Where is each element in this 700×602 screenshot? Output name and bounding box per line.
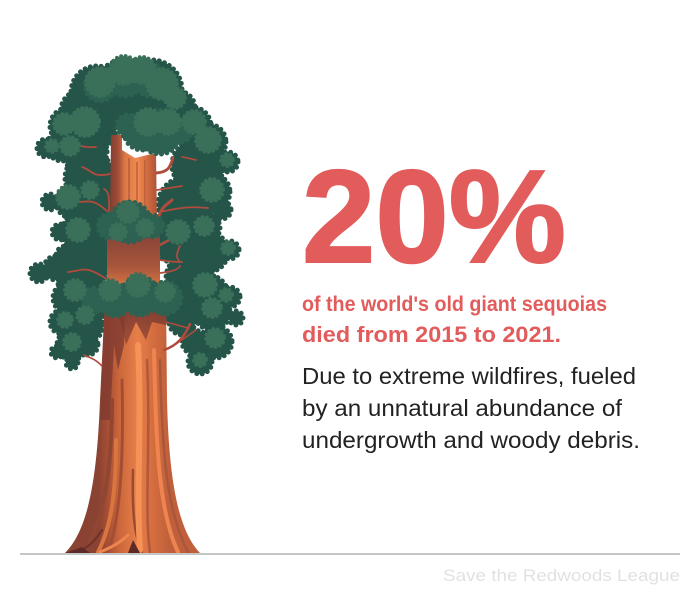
trunk upper streaks [128, 158, 146, 210]
body text: Due to extreme wildfires, fueled [302, 363, 636, 389]
front foliage [83, 60, 192, 316]
trunk upper window [110, 135, 157, 225]
subheading: died from 2015 to 2021. [302, 322, 561, 347]
trunk [65, 298, 200, 553]
trunk base shadow [65, 540, 140, 553]
body text: by an unnatural abundance of [302, 395, 623, 421]
trunk top shade [105, 298, 166, 345]
ground line [20, 553, 680, 555]
trunk dark shading [100, 298, 125, 420]
source credit: Save the Redwoods League [443, 567, 680, 585]
subheading [302, 292, 607, 347]
subheading: of the world's old giant sequoias [302, 292, 607, 316]
icon: giant sequoia tree [30, 56, 243, 553]
big statistic: 20%: 20% [302, 143, 566, 290]
trunk middle window [107, 235, 160, 295]
trunk streaks [80, 345, 188, 552]
body text [302, 363, 640, 453]
body text: undergrowth and woody debris. [302, 427, 640, 453]
branches [68, 142, 208, 280]
mid-tone leaves [46, 56, 234, 366]
right side branch [84, 322, 196, 366]
back foliage [30, 60, 243, 374]
